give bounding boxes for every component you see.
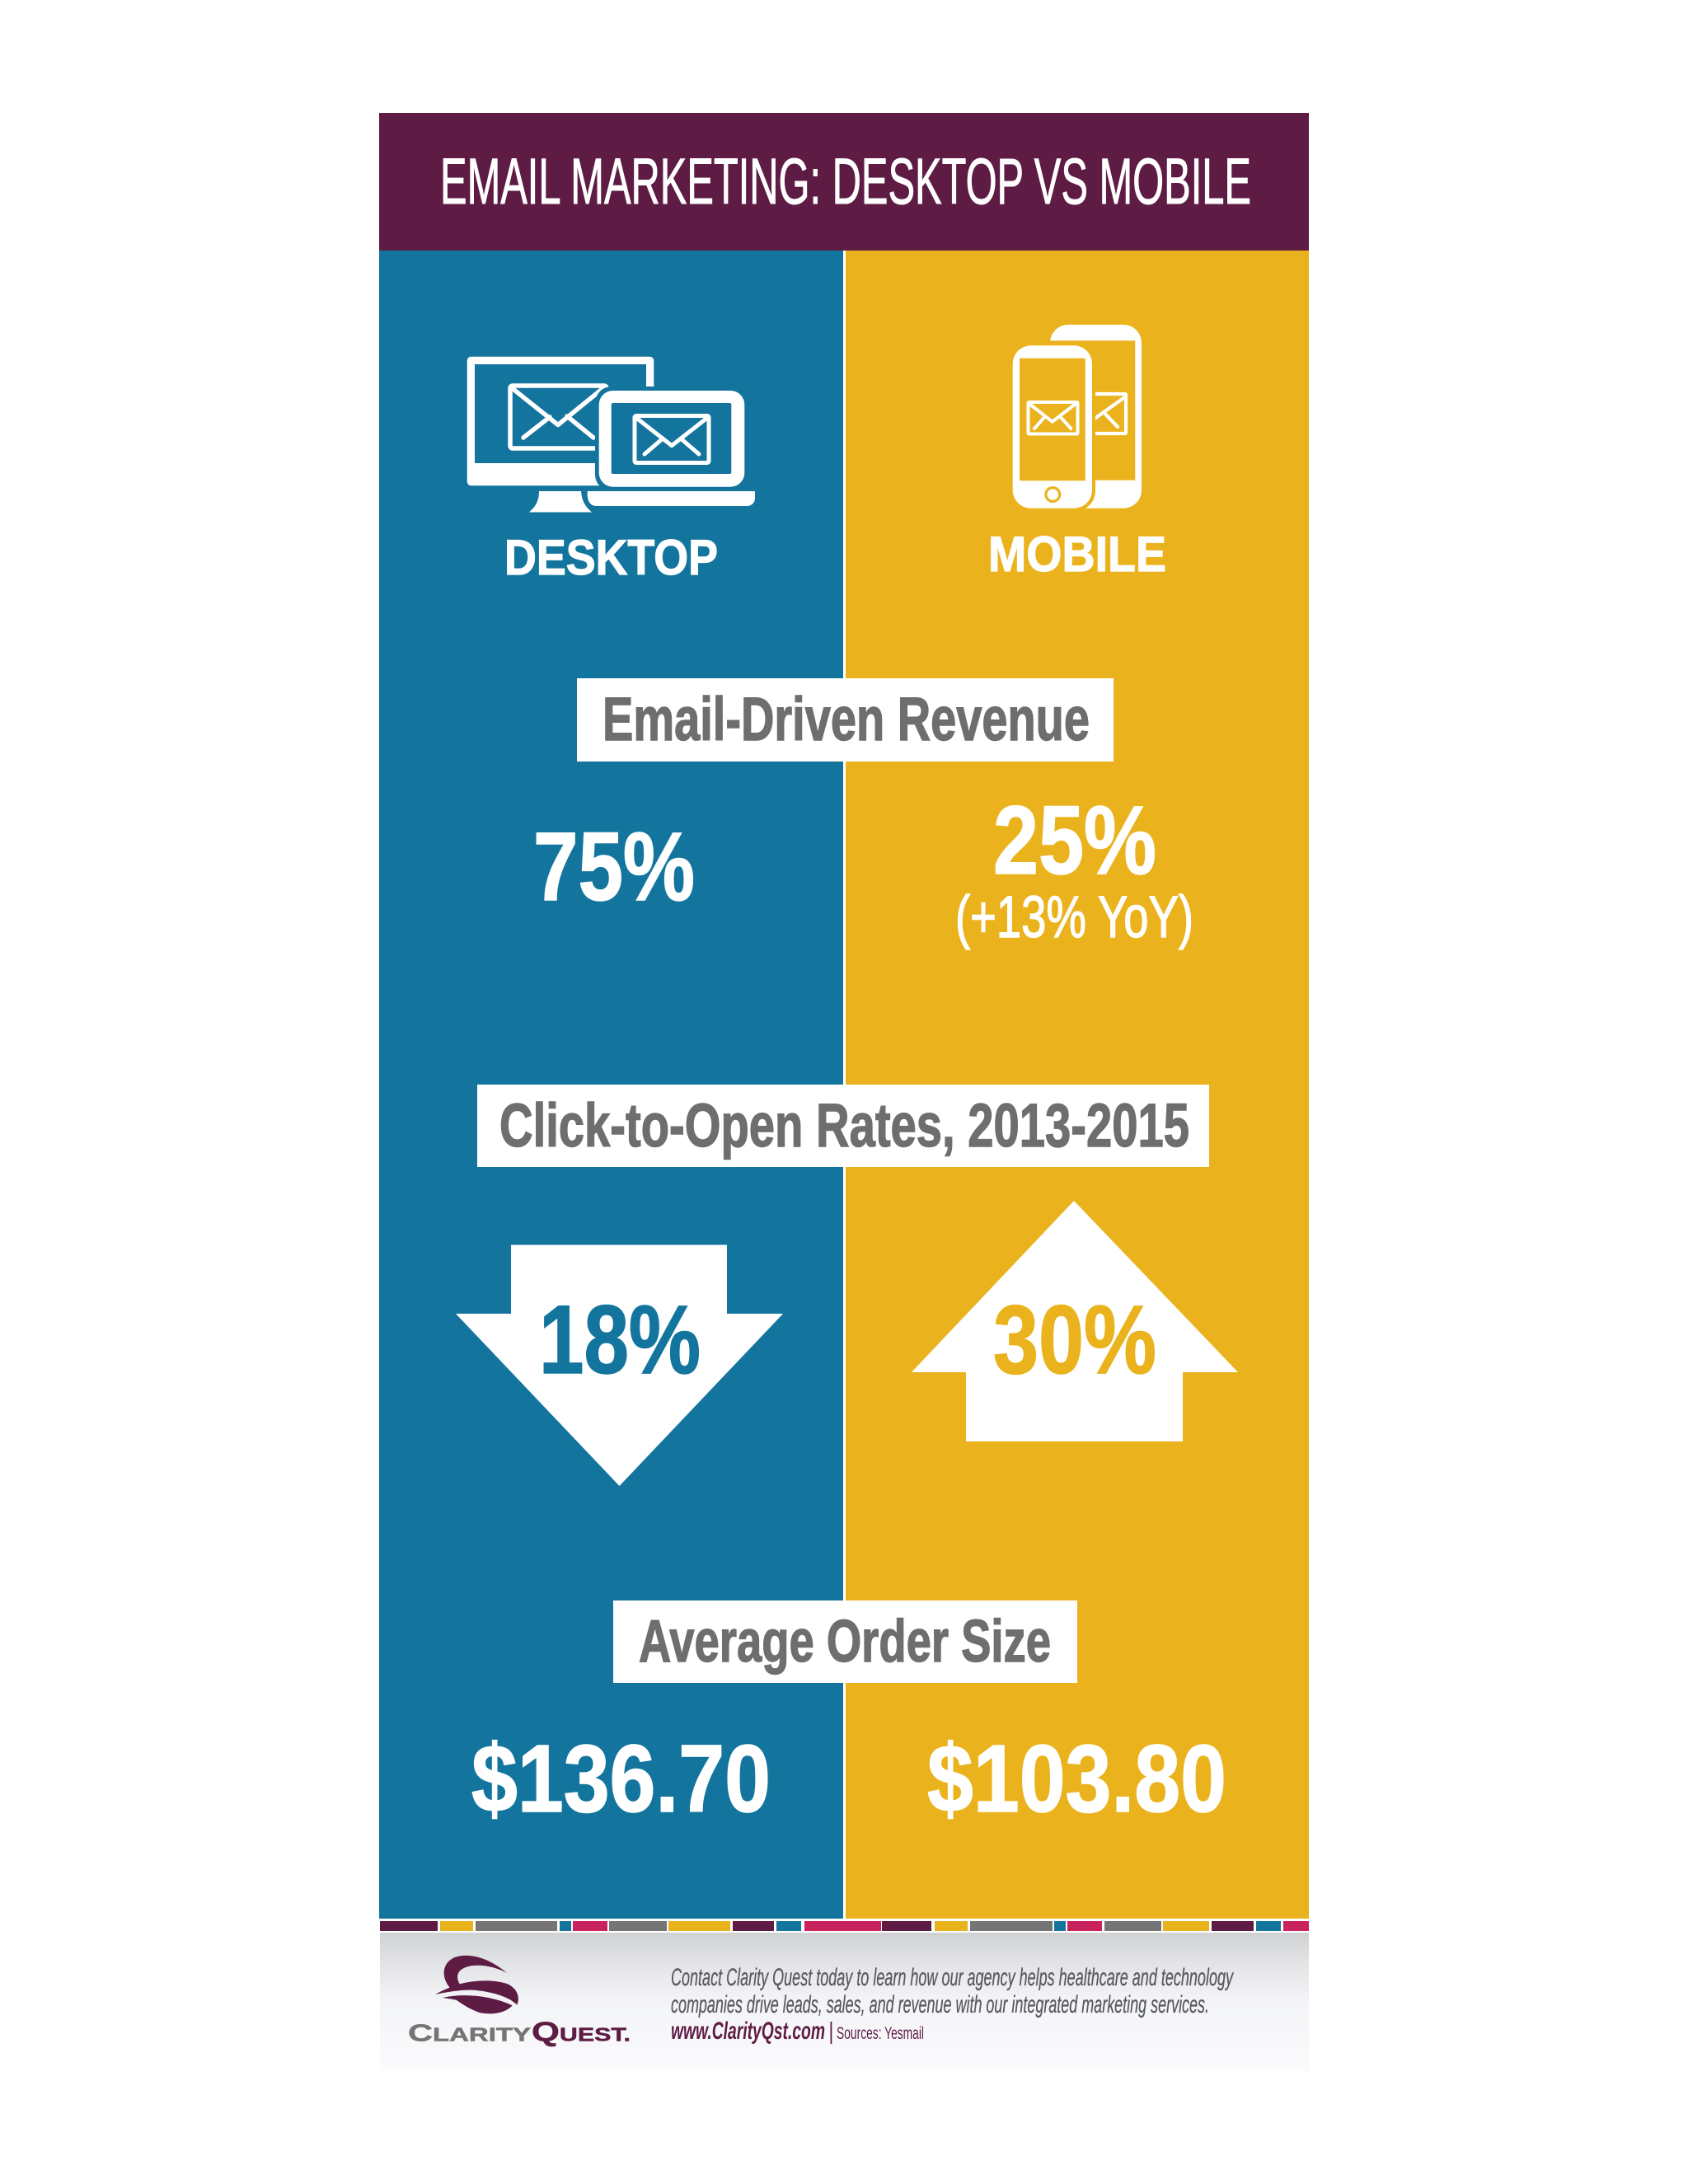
arrow: mobile up 30%	[912, 1201, 1238, 1441]
icon: two smartphones with envelopes	[1010, 325, 1142, 511]
panel: desktop column	[379, 251, 843, 1919]
heading: average order size	[613, 1601, 1077, 1683]
panel: mobile column	[846, 251, 1309, 1919]
colour stripe	[380, 1921, 1309, 1931]
stat: mobile order size: $103.80	[927, 1725, 1226, 1832]
label: desktop: DESKTOP	[504, 530, 718, 585]
heading: average order size: Average Order Size	[639, 1609, 1051, 1675]
logo wordmark: clarity: C LARITY	[408, 2021, 531, 2047]
title banner	[379, 113, 1309, 251]
icon: clarity quest logo	[435, 1956, 518, 2013]
contact text	[671, 1964, 1234, 2018]
divider bar	[831, 2022, 832, 2044]
sources: Sources: Yesmail	[837, 2024, 924, 2043]
contact text: companies drive leads, sales, and revenue with our integrated marketing services.	[671, 1991, 1209, 2018]
arrow: desktop down 18%: 18%	[539, 1286, 701, 1394]
stat: mobile revenue share: 25%	[993, 786, 1156, 895]
logo wordmark: quest: Q UEST.	[532, 2016, 631, 2047]
heading: click-to-open rates: Click-to-Open Rates, 2013-2015	[499, 1091, 1189, 1160]
website link: www.ClarityQst.com	[671, 2018, 825, 2045]
stat: desktop order size: $136.70	[471, 1725, 771, 1832]
panel: footer	[380, 1933, 1309, 2071]
heading: email-driven revenue: Email-Driven Revenue	[603, 685, 1090, 753]
contact text: Contact Clarity Quest today to learn how our agency helps healthcare and technology	[671, 1964, 1234, 1991]
label: mobile: MOBILE	[988, 527, 1166, 582]
heading: click-to-open rates	[477, 1085, 1209, 1167]
stat: desktop revenue share: 75%	[533, 813, 695, 921]
icon: desktop monitor and laptop with envelopes	[467, 357, 755, 513]
heading: email-driven revenue	[577, 678, 1114, 762]
stat: mobile revenue share: (+13% YoY)	[955, 885, 1193, 950]
arrow: desktop down 18%	[456, 1244, 783, 1486]
arrow: mobile up 30%: 30%	[993, 1286, 1156, 1394]
stat: mobile revenue share	[955, 786, 1193, 950]
